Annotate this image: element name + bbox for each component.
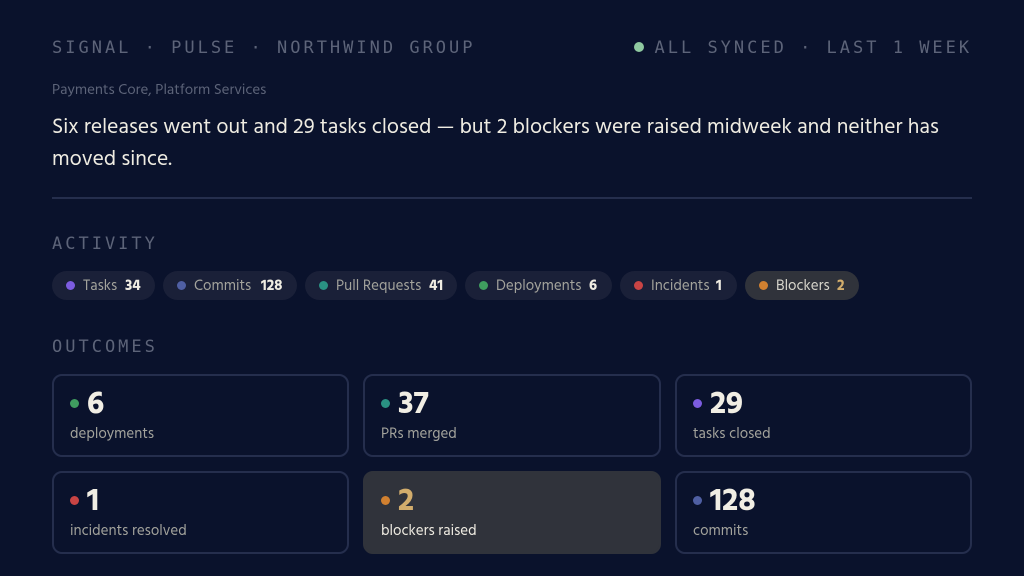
- team names: Payments Core, Platform Services: [52, 79, 266, 103]
- chip: pull requests: 41: [429, 275, 443, 299]
- card: PRs merged: [363, 374, 661, 457]
- chip: commits: 128: [261, 275, 282, 299]
- card: commits: 128: [710, 477, 756, 528]
- card: deployments: [52, 374, 349, 457]
- sync status: [634, 38, 972, 58]
- card: incidents resolved: [52, 471, 349, 554]
- chip: deployments: [465, 271, 612, 300]
- chip: incidents: Incidents: [651, 275, 710, 299]
- card: tasks closed: tasks closed: [693, 423, 771, 447]
- chip: tasks: 34: [125, 275, 141, 299]
- chip: incidents: [620, 271, 737, 300]
- chip: incidents: 1: [716, 275, 722, 299]
- card: tasks closed: 29: [710, 380, 743, 431]
- chip: blockers: [745, 271, 859, 300]
- card: blockers raised: blockers raised: [381, 520, 477, 544]
- summary text: Six releases went out and 29 tasks closed — but 2 blockers were raised midweek and neither has moved since.: [52, 110, 939, 177]
- card: commits: commits: [693, 520, 748, 544]
- card: PRs merged: 37: [398, 380, 429, 431]
- chip: deployments: 6: [589, 275, 597, 299]
- card: blockers raised: 2: [398, 477, 414, 528]
- card: incidents resolved: incidents resolved: [70, 520, 187, 544]
- chip: pull requests: [305, 271, 457, 300]
- header title: SIGNAL · PULSE · NORTHWIND GROUP: [52, 38, 476, 58]
- chip: tasks: Tasks: [83, 275, 117, 299]
- chip: tasks: [52, 271, 155, 300]
- outcome cards: [52, 374, 972, 554]
- status dot: [634, 42, 644, 52]
- outcomes heading: OUTCOMES: [52, 337, 158, 357]
- chip: blockers: Blockers: [776, 275, 830, 299]
- card: deployments: 6: [87, 380, 104, 431]
- activity chips: [52, 271, 859, 300]
- card: commits: [675, 471, 972, 554]
- chip: deployments: Deployments: [496, 275, 582, 299]
- chip: commits: Commits: [194, 275, 251, 299]
- chip: commits: [163, 271, 297, 300]
- status text: ALL SYNCED · LAST 1 WEEK: [654, 38, 972, 58]
- chip: blockers: 2: [837, 275, 845, 299]
- activity heading: ACTIVITY: [52, 234, 158, 254]
- card: PRs merged: PRs merged: [381, 423, 457, 447]
- card: blockers raised: [363, 471, 661, 554]
- chip: pull requests: Pull Requests: [336, 275, 421, 299]
- card: incidents resolved: 1: [87, 477, 99, 528]
- card: deployments: deployments: [70, 423, 154, 447]
- card: tasks closed: [675, 374, 972, 457]
